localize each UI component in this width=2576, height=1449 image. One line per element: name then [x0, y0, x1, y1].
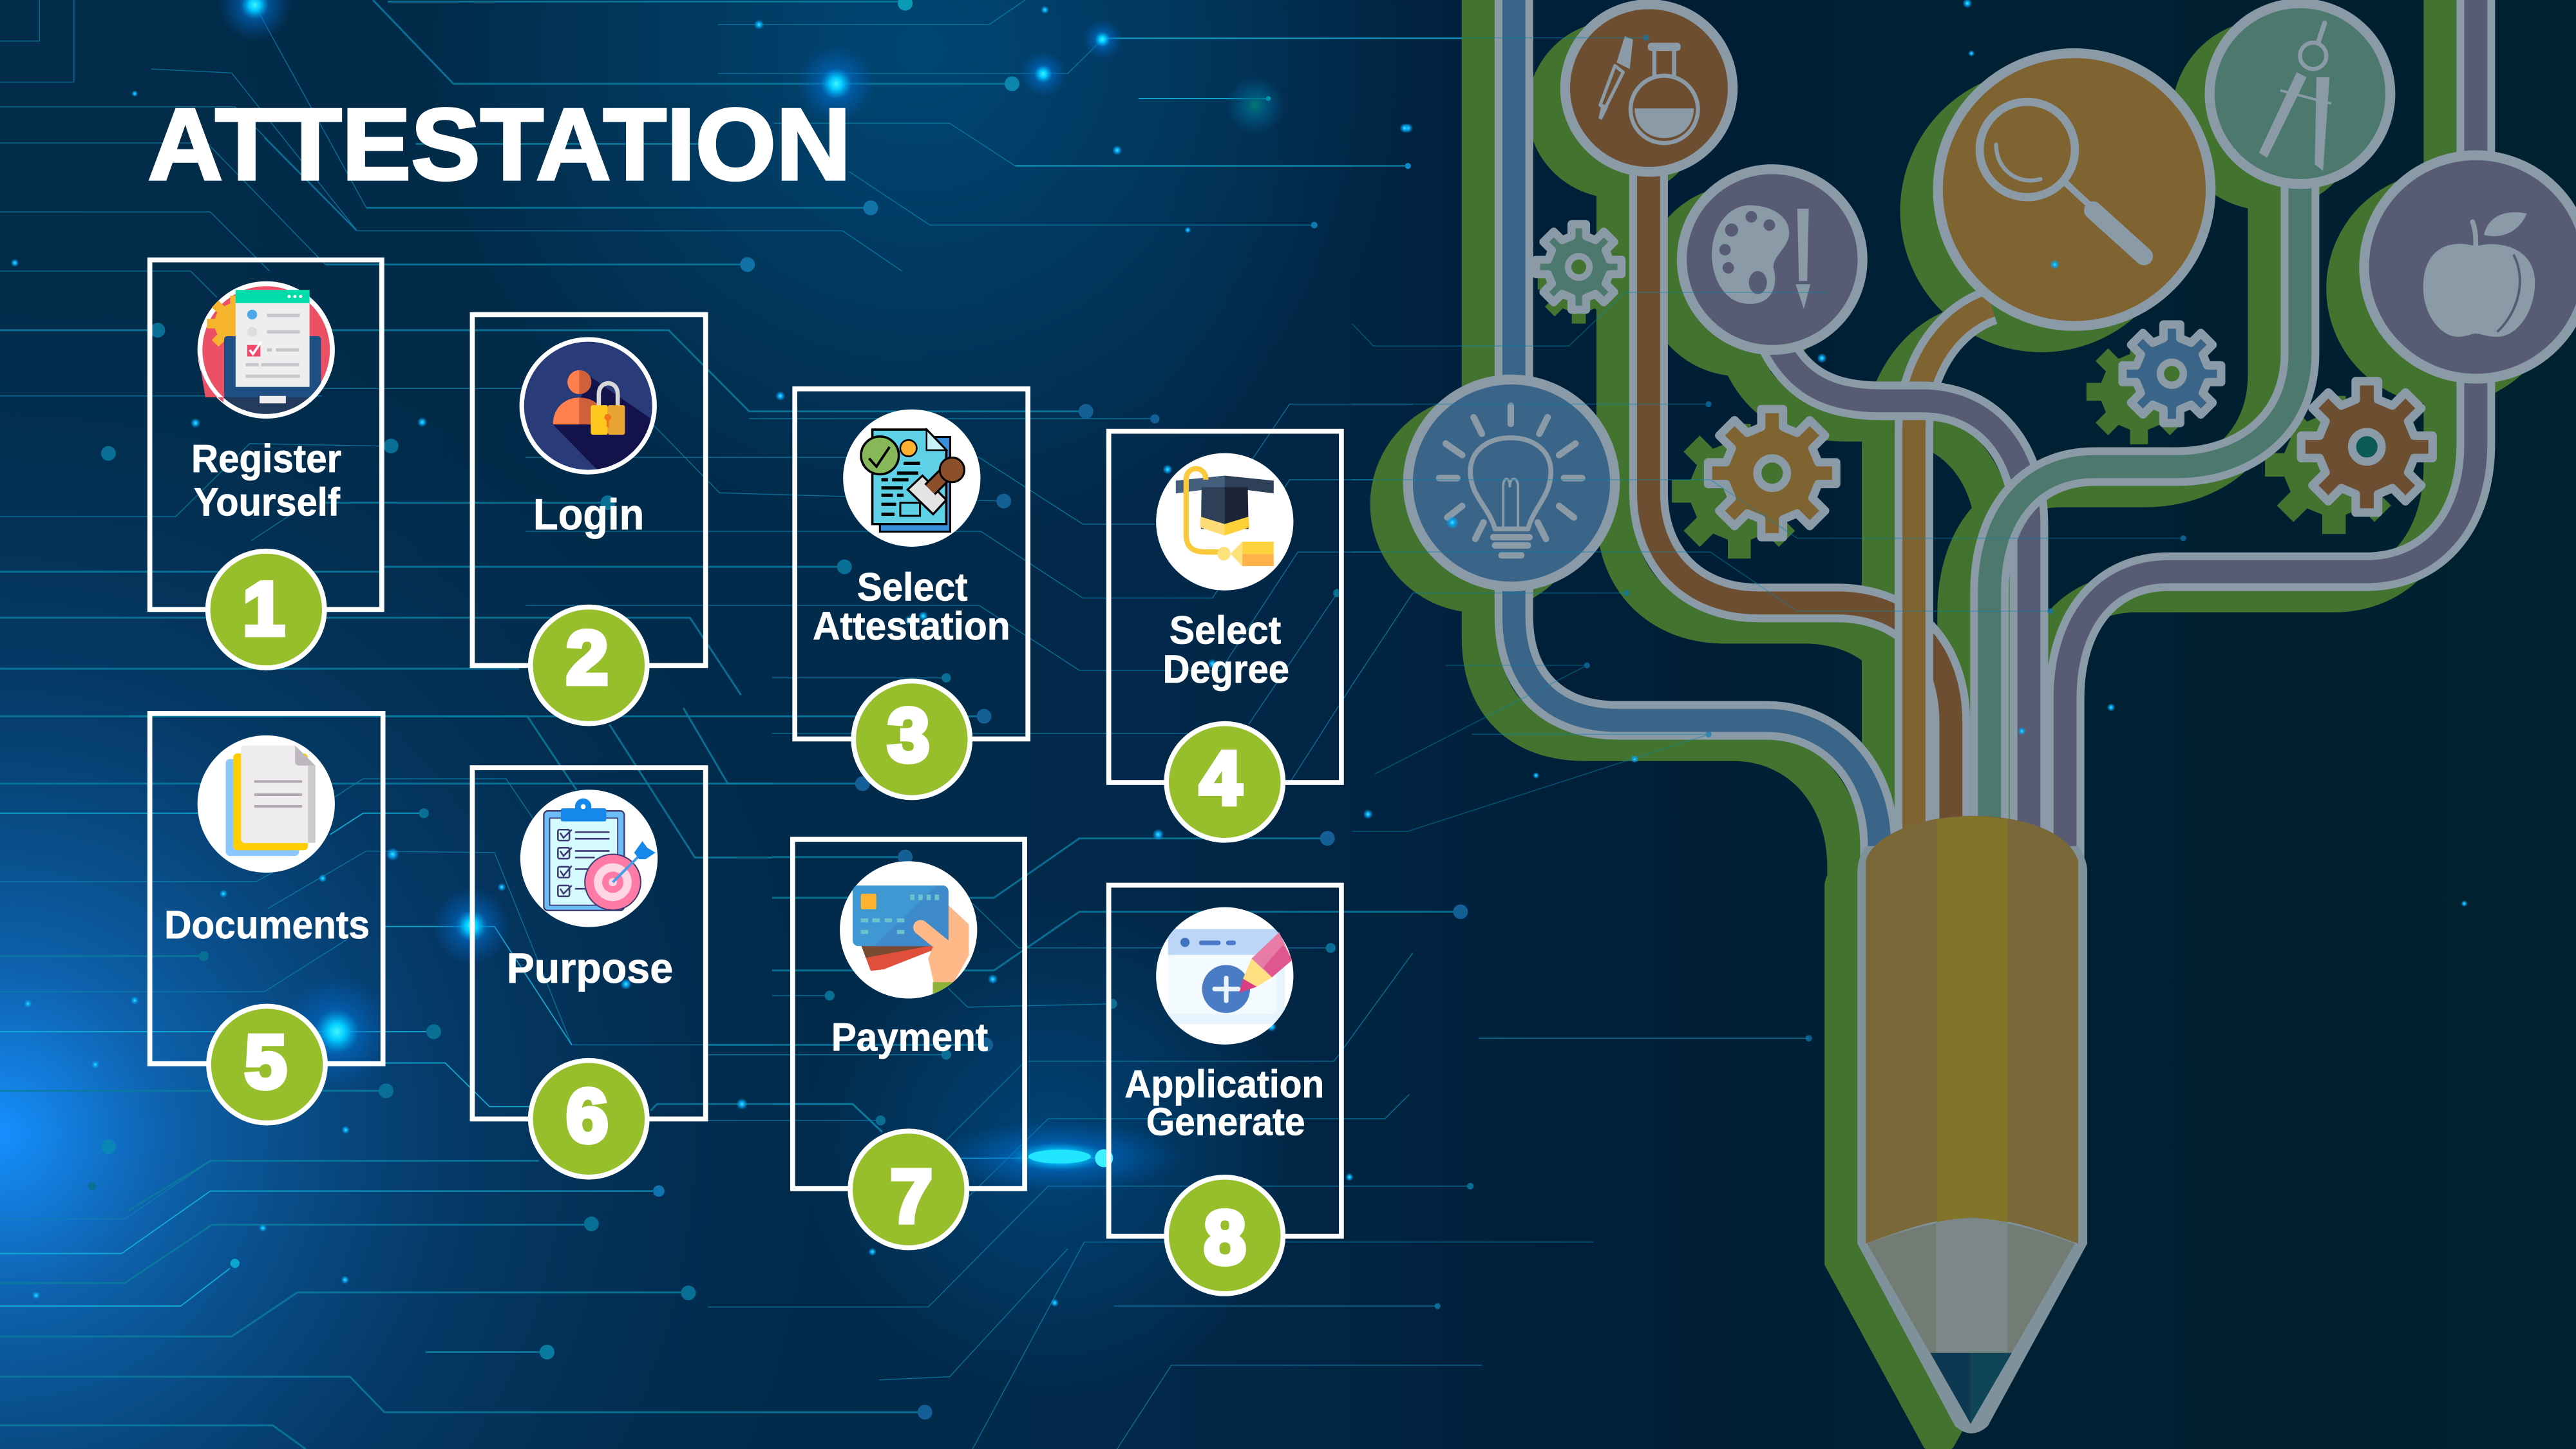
step label: Attestation	[813, 604, 1010, 648]
number badge 3	[853, 681, 970, 798]
number badge 4: 4	[1200, 736, 1242, 820]
number badge 4	[1166, 724, 1283, 840]
step label	[813, 565, 1010, 648]
step label: Select	[857, 565, 968, 609]
panel: step 1 register yourself	[150, 260, 382, 668]
circuit lines and nodes behind content	[0, 0, 1809, 1449]
icon: user with padlock	[520, 337, 657, 475]
icon: graduation cap	[1156, 453, 1293, 591]
panel: step 4 select degree	[1109, 431, 1341, 840]
number badge 1: 1	[243, 567, 285, 651]
icon: paint palette	[1681, 169, 1862, 350]
number badge 1	[208, 551, 325, 668]
icon: apple	[2364, 155, 2576, 379]
step label	[1163, 608, 1289, 691]
number badge 7	[850, 1131, 967, 1248]
icon: flask	[1565, 5, 1733, 172]
step label: Documents	[164, 903, 370, 947]
step label: Purpose	[507, 945, 673, 992]
icon: credit cards in hand	[840, 861, 977, 999]
step label	[1124, 1063, 1324, 1143]
step label: Payment	[831, 1016, 988, 1059]
step label: Select	[1170, 608, 1281, 652]
step label: Login	[533, 491, 644, 539]
step label: Application	[1124, 1063, 1324, 1106]
icon: checklist and target	[520, 790, 658, 927]
number badge 5	[209, 1006, 325, 1123]
icon: compass	[2210, 3, 2391, 184]
icon: light bulb	[1408, 379, 1615, 587]
icon: registration form	[197, 281, 335, 421]
title: ATTESTATION	[148, 88, 851, 202]
panel: step 6 purpose	[472, 768, 706, 1177]
circuit lines crossing the tree	[1352, 35, 2186, 1041]
number badge 2	[531, 607, 647, 724]
step label: Generate	[1146, 1100, 1305, 1143]
number badge 8: 8	[1204, 1195, 1246, 1280]
number badge 6	[531, 1061, 647, 1177]
panel: step 7 payment	[793, 839, 1025, 1248]
panel: step 2 login	[472, 315, 706, 724]
panel: step 5 documents	[150, 714, 383, 1123]
number badge 2: 2	[566, 615, 608, 699]
number badge 7: 7	[891, 1154, 933, 1238]
panel: step 3 select attestation	[795, 389, 1028, 798]
tree: branch pipes	[1514, 0, 2476, 871]
panel: step 8 application generate	[1109, 885, 1341, 1294]
tree: gears	[1536, 224, 2432, 537]
step label: Degree	[1163, 647, 1289, 691]
pencil	[1857, 816, 2087, 1434]
icon: magnifying glass	[1938, 53, 2211, 326]
number badge 6: 6	[566, 1074, 608, 1158]
step label	[191, 437, 341, 524]
icon: new application window	[1156, 907, 1293, 1045]
number badge 5: 5	[245, 1019, 287, 1104]
step label: Register	[191, 437, 341, 480]
tree: green shadow	[1370, 0, 2559, 1449]
icon: stacked documents	[198, 735, 335, 873]
number badge 3: 3	[887, 692, 929, 777]
step label: Yourself	[194, 480, 341, 524]
number badge 8	[1166, 1177, 1283, 1294]
icon: stamped document	[843, 410, 980, 547]
